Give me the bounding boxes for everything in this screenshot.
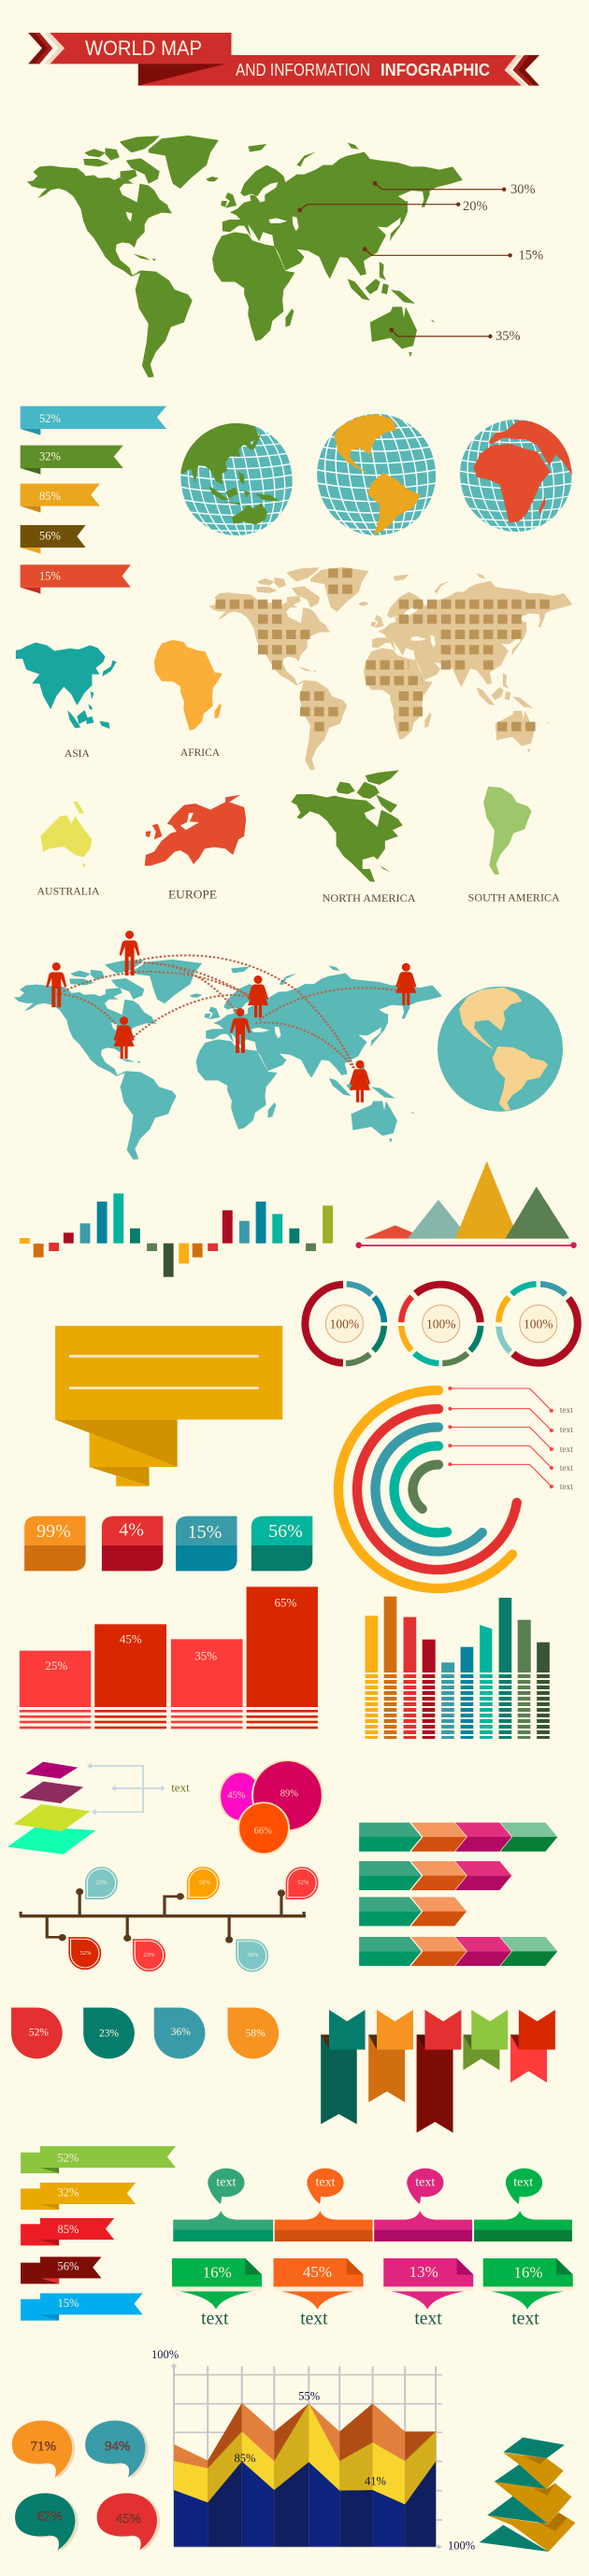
equalizer bar chart	[366, 1597, 550, 1739]
globe: Africa in red	[460, 420, 572, 532]
Asia continent	[16, 643, 117, 729]
folded percentage cards with funnels: text	[511, 2309, 539, 2328]
layered area chart	[151, 2348, 475, 2553]
map callouts with percentages: 35%	[496, 329, 521, 344]
arc chart leader lines and labels: text	[560, 1426, 573, 1435]
large drop badges: 58%	[246, 2028, 266, 2039]
teal world map	[14, 960, 442, 1160]
percentage cards row: 15%	[188, 1522, 222, 1543]
South America continent	[483, 787, 532, 875]
arc chart leader lines and labels: text	[560, 1464, 573, 1473]
Africa continent	[154, 640, 223, 731]
label: Africa: AFRICA	[180, 747, 221, 759]
globe: Asia in green	[180, 423, 293, 535]
overlapping bubbles: 89%	[280, 1789, 298, 1800]
percentage ribbons: 32%	[39, 450, 61, 463]
zigzag folded sheets	[480, 2438, 576, 2552]
layered ribbons: 85%	[58, 2223, 79, 2236]
folded percentage cards with funnels: 13%	[409, 2263, 438, 2281]
red striped bar chart: 65%	[274, 1596, 296, 1610]
percentage cards row	[24, 1516, 312, 1571]
layered area chart: 100%	[448, 2540, 475, 2553]
arc chart leader lines and labels: text	[560, 1406, 573, 1416]
concentric arc chart	[338, 1390, 517, 1588]
speech bubble percentages: 94%	[105, 2440, 131, 2455]
folded percentage cards with funnels: text	[201, 2309, 229, 2328]
percentage ribbons: 15%	[39, 570, 61, 583]
layered ribbons	[21, 2146, 176, 2321]
layered ribbons: 56%	[58, 2259, 79, 2272]
North America continent	[291, 770, 403, 882]
speech pins over segmented bar: text	[415, 2175, 435, 2189]
folded gold banner	[55, 1326, 282, 1487]
layered area chart: 100%	[151, 2348, 179, 2361]
Australia continent	[40, 801, 92, 867]
donut gauge 3	[482, 1268, 589, 1380]
title banner: INFOGRAPHIC	[381, 61, 490, 79]
folded percentage cards with funnels	[172, 2258, 573, 2328]
overlapping bubbles: 45%	[227, 1791, 246, 1801]
donut gauge 2: 100%	[426, 1317, 455, 1331]
folded percentage cards with funnels: 16%	[203, 2263, 232, 2281]
folded percentage cards with funnels: 16%	[513, 2263, 543, 2281]
donut gauge 2	[385, 1268, 497, 1380]
people markers	[46, 931, 416, 1103]
arc chart leader lines and labels	[448, 1387, 573, 1492]
label: Australia: AUSTRALIA	[37, 887, 100, 898]
stacked layers diagram: text	[171, 1781, 190, 1795]
map callouts with percentages: 20%	[463, 199, 488, 214]
label: North America: NORTH AMERICA	[323, 893, 416, 904]
large drop badges: 52%	[29, 2028, 49, 2039]
up and down bar chart	[20, 1193, 333, 1277]
speech pins over segmented bar: text	[316, 2175, 336, 2189]
large globe	[438, 987, 563, 1112]
folded percentage cards with funnels: text	[414, 2309, 442, 2328]
percentage ribbons: 52%	[39, 412, 61, 425]
timeline with drop markers: 58%	[199, 1880, 211, 1886]
timeline with drop markers: 52%	[297, 1880, 309, 1886]
red striped bar chart: 45%	[120, 1632, 142, 1646]
label: Europe: EUROPE	[168, 889, 217, 902]
speech bubble percentages: 71%	[30, 2440, 56, 2455]
Europe continent	[145, 795, 246, 866]
folded percentage cards with funnels: 45%	[303, 2263, 332, 2281]
percentage ribbons: 56%	[39, 529, 61, 542]
percentage cards row: 56%	[268, 1521, 303, 1542]
title banner: WORLD MAP	[85, 36, 202, 60]
map callouts with percentages: 15%	[518, 249, 543, 263]
large drop badges	[11, 2008, 279, 2058]
arc chart leader lines and labels: text	[560, 1445, 573, 1455]
red striped bar chart: 25%	[45, 1658, 67, 1672]
hanging bookmark flags	[321, 2010, 555, 2133]
layered area chart: 85%	[235, 2452, 255, 2465]
dotted connection arcs	[56, 955, 402, 1070]
stacked layers diagram	[7, 1762, 190, 1855]
percentage ribbons: 85%	[39, 490, 61, 503]
percentage cards row: 4%	[119, 1519, 144, 1540]
green world map	[27, 135, 463, 377]
overlapping bubbles	[220, 1760, 323, 1854]
timeline with drop markers: 36%	[247, 1952, 259, 1958]
layered area chart: 55%	[298, 2389, 320, 2402]
beige checkered world map	[209, 567, 572, 770]
red striped bar chart: 35%	[194, 1649, 217, 1663]
layered ribbons: 52%	[58, 2151, 79, 2164]
speech bubble percentages	[12, 2421, 160, 2551]
timeline with drop markers: 23%	[144, 1952, 155, 1958]
overlapping bubbles: 66%	[254, 1826, 272, 1836]
speech bubble percentages: 82%	[36, 2510, 63, 2525]
label: South America: SOUTH AMERICA	[468, 893, 560, 904]
label: Asia: ASIA	[65, 748, 91, 760]
large drop badges: 23%	[99, 2028, 119, 2039]
speech pins over segmented bar	[173, 2169, 572, 2242]
timeline with drop markers	[20, 1867, 318, 1971]
arc chart leader lines and labels: text	[560, 1483, 573, 1492]
large drop badges: 36%	[171, 2027, 191, 2038]
donut gauge 1: 100%	[330, 1317, 359, 1331]
title banner: AND INFORMATION	[236, 61, 370, 79]
speech pins over segmented bar: text	[513, 2175, 533, 2189]
map callouts with percentages: 30%	[510, 182, 536, 197]
title banner	[28, 33, 539, 86]
percentage cards row: 99%	[36, 1521, 71, 1542]
map callouts with percentages	[297, 181, 543, 344]
chevron progress rows	[359, 1823, 557, 1966]
timeline with drop markers: 23%	[96, 1880, 108, 1886]
layered area chart: 41%	[365, 2475, 386, 2488]
layered ribbons: 15%	[58, 2297, 79, 2310]
donut gauge 1	[288, 1268, 400, 1380]
layered ribbons: 32%	[58, 2186, 79, 2199]
timeline with drop markers: 52%	[80, 1950, 92, 1957]
globe: Americas in orange	[317, 414, 436, 535]
percentage ribbons	[21, 406, 166, 593]
folded percentage cards with funnels: text	[300, 2309, 328, 2328]
speech bubble percentages: 45%	[116, 2512, 141, 2526]
mountain triangles chart	[356, 1161, 577, 1248]
red striped bar chart	[20, 1587, 318, 1729]
speech pins over segmented bar: text	[216, 2175, 237, 2189]
donut gauge 3: 100%	[524, 1317, 553, 1331]
